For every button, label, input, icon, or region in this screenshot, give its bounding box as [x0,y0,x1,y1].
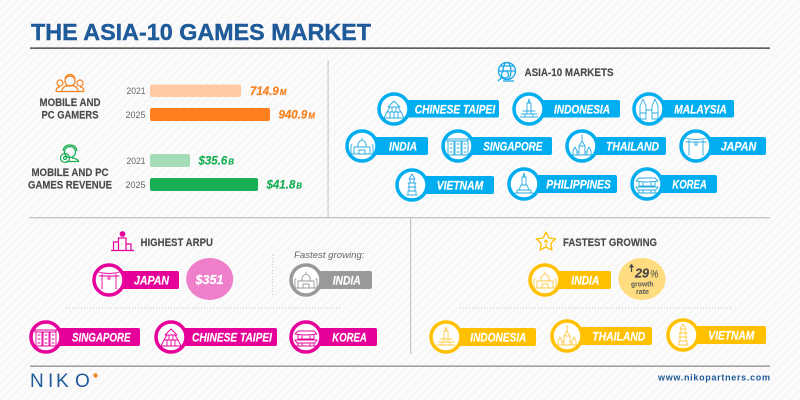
bar: revenue 2021: 2021 [126,156,146,166]
text: website: www.nikopartners.com [657,372,770,382]
logo: niko: NIKO [30,371,90,392]
bar: revenue 2025 [126,178,302,192]
badge: thailand [567,131,666,161]
badge: korea [632,169,717,199]
badge: chinese taipei: CHINESE TAIPEI [192,330,273,344]
badge: india [347,131,428,161]
bar: gamers 2025: 940.9M [278,110,315,122]
badge: philippines: PHILIPPINES [546,178,611,192]
label: mobile and pc gamers: PC GAMERS [42,110,98,122]
text: fastest growing note: Fastest growing: [294,250,365,260]
callout: growth rate: % [650,269,659,281]
badge: japan [94,265,179,295]
badge: india: INDIA [571,274,599,288]
bar: revenue 2021: $35.6B [198,156,234,168]
bar: revenue 2025: 2025 [126,180,146,190]
panel: fastest growing [431,232,766,352]
label: mobile and pc games revenue: MOBILE AND PC [32,167,109,179]
badge: indonesia [431,322,536,352]
callout: growth rate: 29 [634,266,650,281]
badge: singapore: SINGAPORE [483,140,543,154]
heading: fastest growing: FASTEST GROWING [563,237,657,249]
badge: singapore: SINGAPORE [72,330,131,344]
icon: headset gamer [60,145,78,162]
bar: gamers 2025: 2025 [126,110,146,120]
badge: indonesia [514,94,620,124]
badge: japan: JAPAN [134,274,169,288]
badge: vietnam: VIETNAM [708,328,755,342]
badge: thailand: THAILAND [592,330,646,344]
icon: gamers group [56,74,84,92]
heading: highest arpu: HIGHEST ARPU [140,237,213,249]
callout: arpu value: $351 [194,273,224,287]
callout: growth rate: rate [636,287,649,296]
icon: star [536,232,556,250]
badge: singapore [443,131,552,161]
badge: malaysia [634,94,734,124]
badge: vietnam: VIETNAM [437,178,484,192]
bar: revenue 2021 [126,154,234,168]
badge: chinese taipei: CHINESE TAIPEI [415,102,496,116]
bar: gamers 2021 [126,84,287,98]
badge: vietnam [397,170,494,200]
callout: growth rate: growth [631,280,654,289]
title: THE ASIA-10 GAMES MARKET [31,19,371,45]
callout: arpu value [186,258,233,300]
panel: gamers and revenue bar charts [28,74,315,192]
callout: growth rate [618,258,666,300]
badge: indonesia: INDONESIA [470,330,526,344]
bar: revenue 2025: $41.8B [266,180,302,192]
badge: india: INDIA [389,140,417,154]
badge: chinese taipei [156,322,277,352]
bar: gamers 2025 [126,108,315,122]
icon: podium [111,232,134,250]
heading: asia-10 markets: ASIA-10 MARKETS [524,67,614,79]
panel: asia-10 markets [347,62,766,200]
badge: singapore [31,322,140,352]
badge: india grey [291,265,372,295]
badge: philippines [509,169,617,199]
icon: globe [498,62,516,81]
panel: highest arpu [31,232,377,352]
badge: chinese taipei [379,94,499,124]
badge: korea [291,322,377,352]
badge: japan [681,131,766,161]
label: mobile and pc gamers: MOBILE AND [40,97,101,109]
badge: india grey: INDIA [333,274,361,288]
badge: malaysia: MALAYSIA [674,102,727,116]
badge: korea: KOREA [672,178,707,192]
badge: thailand [552,321,652,351]
bar: gamers 2021: 2021 [126,86,146,96]
label: mobile and pc games revenue: GAMES REVENUE [28,180,112,192]
badge: vietnam [668,320,766,350]
badge: indonesia: INDONESIA [554,102,610,116]
badge: india [530,265,611,295]
badge: japan: JAPAN [721,140,756,154]
badge: thailand: THAILAND [606,140,659,154]
bar: gamers 2021: 714.9M [250,86,287,98]
label: mobile and pc games revenue [28,167,112,192]
badge: korea: KOREA [332,330,367,344]
label: mobile and pc gamers [40,97,101,122]
